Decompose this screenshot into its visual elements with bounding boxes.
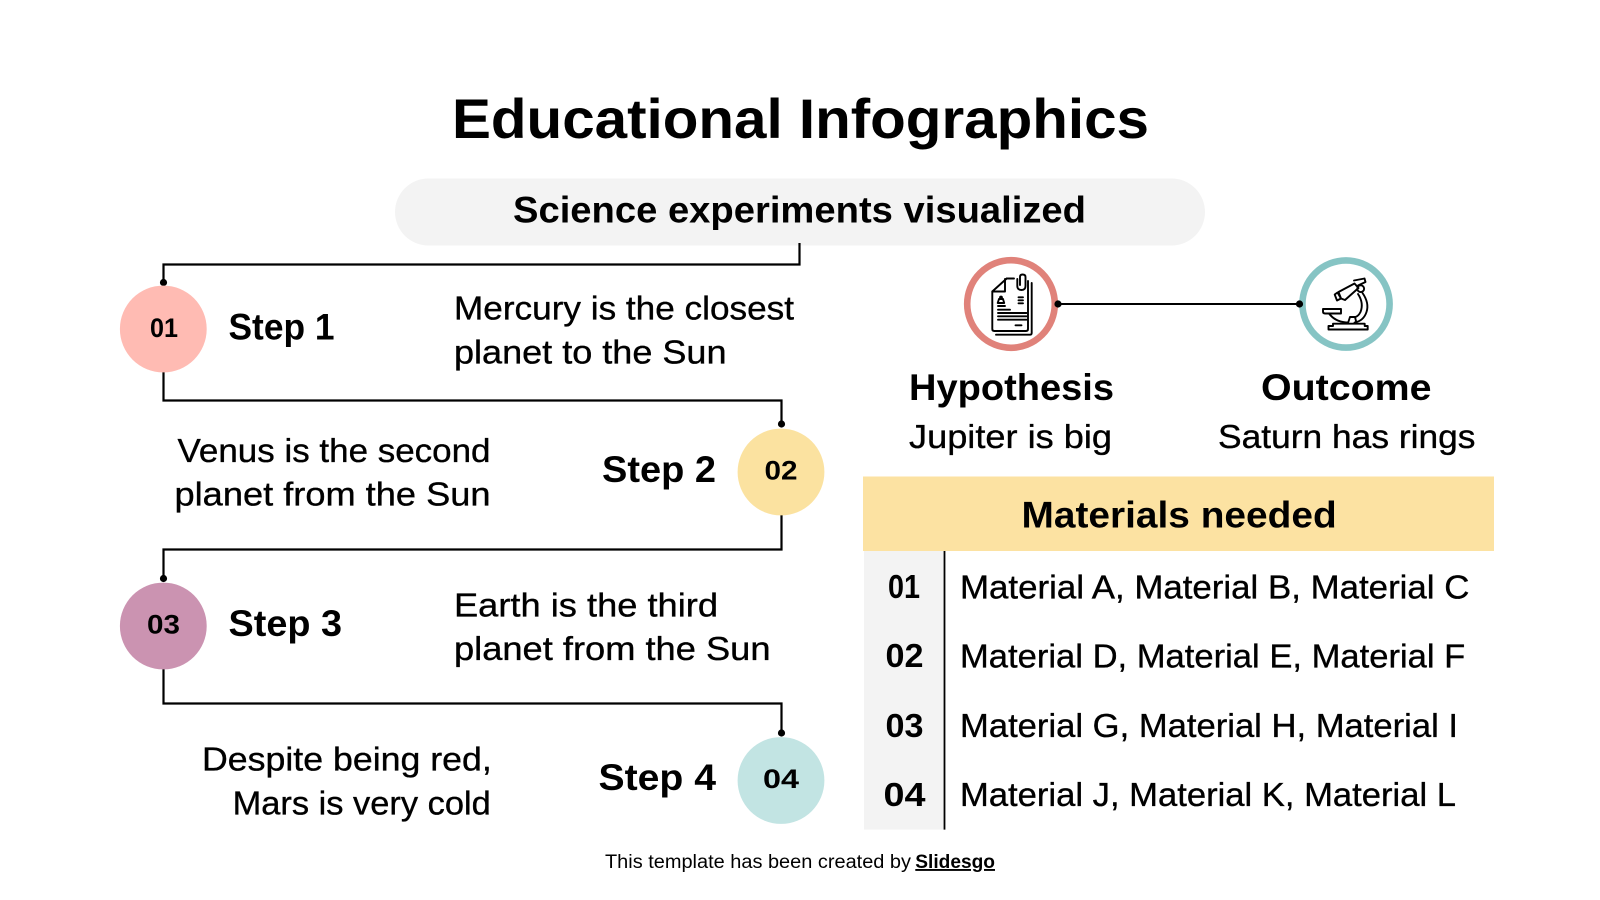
footer credit: This template has been created by (605, 852, 912, 873)
icon: microscope (1302, 260, 1390, 348)
step 3 description: Earth is the third (454, 586, 718, 623)
hypothesis text: Jupiter is big (909, 418, 1112, 455)
row 04: 04 (884, 776, 926, 813)
panel: step 1 (120, 286, 794, 372)
subtitle pill (395, 178, 1205, 246)
row 02: Material D, Material E, Material F (960, 638, 1465, 674)
table header: Materials needed (1022, 494, 1337, 536)
row 03: 03 (886, 707, 924, 744)
step 4 badge (738, 737, 824, 824)
step 1 label: Step 1 (228, 306, 334, 348)
panel: step 4 (202, 737, 824, 824)
panel: outcome (1218, 260, 1476, 455)
outcome heading: Outcome (1261, 367, 1432, 408)
step 4 description (202, 740, 492, 821)
step 2 badge: 02 (764, 456, 798, 486)
row 04: Material J, Material K, Material L (960, 776, 1456, 813)
step 3 badge: 03 (147, 610, 180, 640)
step 4 label: Step 4 (598, 757, 716, 798)
step 4 description: Mars is very cold (233, 784, 491, 821)
row 01: Material A, Material B, Material C (960, 568, 1469, 606)
step 4 description: Despite being red, (202, 740, 492, 777)
step 1 description: planet to the Sun (454, 333, 726, 370)
row 01: 01 (888, 568, 920, 605)
step 1 description: Mercury is the closest (454, 289, 794, 326)
step 2 description: Venus is the second (178, 432, 490, 469)
step 3 label: Step 3 (228, 603, 342, 644)
number column (864, 551, 944, 830)
step 1 badge (120, 286, 207, 372)
hypothesis heading: Hypothesis (909, 367, 1114, 408)
step 1 badge: 01 (150, 313, 178, 343)
step 4 badge: 04 (763, 764, 799, 794)
outcome text: Saturn has rings (1218, 418, 1476, 455)
panel: step 3 (120, 583, 770, 669)
step 3 description: planet from the Sun (454, 630, 770, 667)
title: Educational Infographics (452, 87, 1149, 150)
connector: hypothesis to outcome (1054, 300, 1303, 308)
row 02: 02 (886, 637, 924, 674)
panel: materials table (863, 476, 1494, 830)
panel: hypothesis (909, 260, 1114, 455)
step 2 description: planet from the Sun (174, 476, 490, 512)
row 03: Material G, Material H, Material I (960, 707, 1458, 744)
step 2 badge (738, 429, 824, 515)
step 3 badge (120, 583, 207, 669)
step 2 description (174, 432, 490, 512)
footer credit: Slidesgo (915, 852, 995, 873)
subtitle pill: Science experiments visualized (513, 190, 1086, 230)
icon: document with paperclip (967, 260, 1055, 348)
panel: step 2 (174, 429, 824, 515)
table header (863, 476, 1494, 551)
step 3 description (454, 586, 770, 667)
connector: step flow line (160, 243, 799, 737)
step 1 description (454, 289, 794, 370)
step 2 label: Step 2 (602, 449, 716, 490)
